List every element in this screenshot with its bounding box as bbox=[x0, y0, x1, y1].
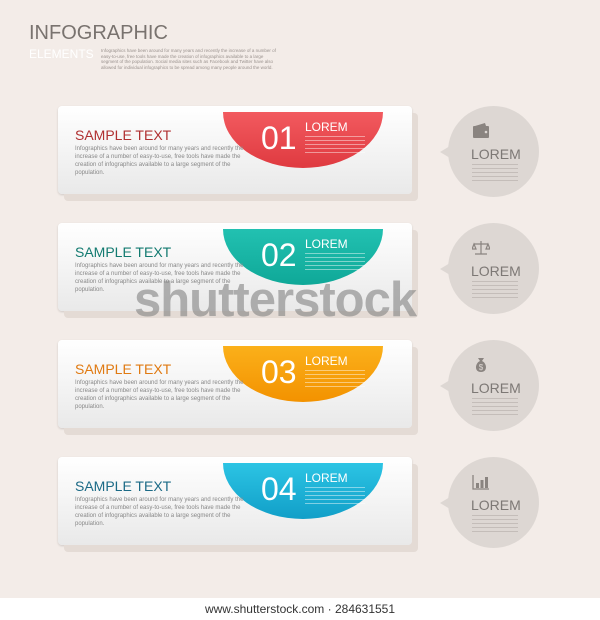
watermark: shutterstock bbox=[134, 273, 416, 327]
footer bar: www.shutterstock.com · 284631551 bbox=[205, 602, 395, 616]
semicircle 02: LOREM bbox=[305, 237, 348, 251]
heading 04: SAMPLE TEXT bbox=[75, 478, 171, 494]
semicircle 02 bbox=[223, 229, 383, 285]
semicircle 03: 03 bbox=[261, 354, 297, 390]
bubble 01: LOREM bbox=[471, 146, 521, 162]
title: INFOGRAPHIC bbox=[29, 22, 168, 44]
semicircle 04: 04 bbox=[261, 471, 297, 507]
icon: money bag bbox=[476, 358, 486, 372]
bubble 03 bbox=[448, 340, 539, 431]
semicircle 01: 01 bbox=[261, 120, 297, 156]
card 01 bbox=[58, 106, 412, 194]
icon: scales bbox=[472, 241, 490, 255]
semicircle 01 bbox=[223, 112, 383, 168]
bubble 04: LOREM bbox=[471, 497, 521, 513]
bubble 02 bbox=[448, 223, 539, 314]
semicircle 03: LOREM bbox=[305, 354, 348, 368]
icon: chart bbox=[472, 475, 489, 490]
heading 02: SAMPLE TEXT bbox=[75, 244, 171, 260]
card 02 bbox=[58, 223, 412, 311]
intro text: Infographics have been around for many years and recently the increase of a number of easy-to-use, free tools have made the creation of infographics available to a large segment of the population. Social media sites such as Facebook and Twitter have also allowed for individual infographics to be spread among many people around the world. bbox=[101, 48, 276, 70]
text 02: Infographics have been around for many years and recently the increase of a number of easy-to-use, free tools have made the creation of infographics available to a large segment of the population. bbox=[75, 263, 243, 293]
heading 01: SAMPLE TEXT bbox=[75, 127, 171, 143]
text 03: Infographics have been around for many years and recently the increase of a number of easy-to-use, free tools have made the creation of infographics available to a large segment of the population. bbox=[75, 380, 243, 410]
bubble 01 bbox=[448, 106, 539, 197]
semicircle 01: LOREM bbox=[305, 120, 348, 134]
footer bar bbox=[0, 598, 600, 620]
text 04: Infographics have been around for many years and recently the increase of a number of easy-to-use, free tools have made the creation of infographics available to a large segment of the population. bbox=[75, 497, 243, 527]
bubble 03: LOREM bbox=[471, 380, 521, 396]
text 01: Infographics have been around for many years and recently the increase of a number of easy-to-use, free tools have made the creation of infographics available to a large segment of the population. bbox=[75, 146, 243, 176]
semicircle 03 bbox=[223, 346, 383, 402]
card 03 bbox=[58, 340, 412, 428]
subtitle: ELEMENTS bbox=[29, 47, 94, 61]
semicircle 04 bbox=[223, 463, 383, 519]
icon: wallet bbox=[473, 123, 489, 138]
heading 03: SAMPLE TEXT bbox=[75, 361, 171, 377]
bubble 04 bbox=[448, 457, 539, 548]
semicircle 02: 02 bbox=[261, 237, 297, 273]
icon: money bag: $ bbox=[479, 363, 484, 372]
bubble 02: LOREM bbox=[471, 263, 521, 279]
semicircle 04: LOREM bbox=[305, 471, 348, 485]
card 04 bbox=[58, 457, 412, 545]
